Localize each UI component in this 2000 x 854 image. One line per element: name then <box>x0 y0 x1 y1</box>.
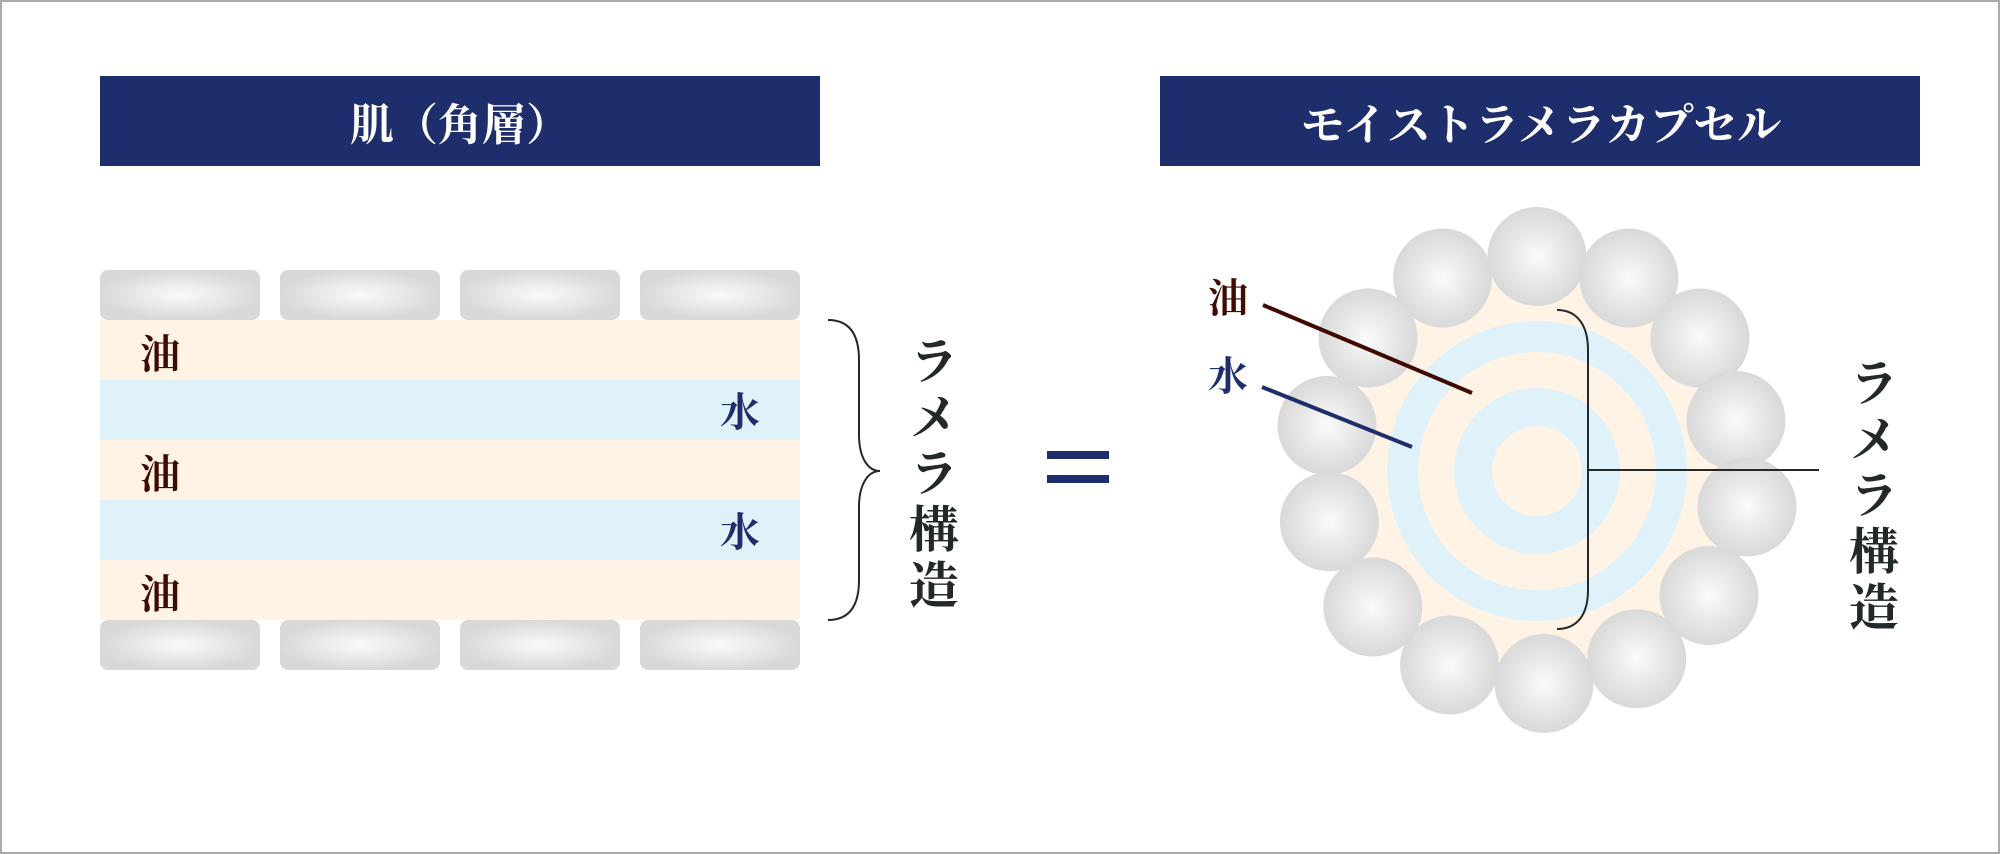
oil layer 3: 油 <box>140 572 180 617</box>
water layer 2: 水 <box>720 510 760 555</box>
brace: skin lamellar range <box>828 320 880 620</box>
top row of corneocyte bricks <box>100 270 800 320</box>
heading: skin (stratum corneum) <box>100 76 820 166</box>
water layer 1: 水 <box>720 390 760 435</box>
oil layer 2: 油 <box>140 452 180 497</box>
panel: skin lamellar diagram <box>100 270 800 670</box>
panel: capsule diagram <box>1278 207 1796 733</box>
capsule outer spheres <box>1278 207 1796 733</box>
capsule concentric oil and water rings <box>1345 279 1729 663</box>
callout: oil <box>1208 276 1472 393</box>
label: lamellar structure (right): ラメラ構造 <box>1842 357 1899 637</box>
callout: water <box>1208 354 1412 447</box>
brace: capsule lamellar range with leader line <box>1557 310 1819 629</box>
oil layer 1 <box>100 320 800 380</box>
callout: oil: 油 <box>1208 276 1248 321</box>
heading: skin (stratum corneum): 肌（角層） <box>350 101 570 150</box>
label: lamellar structure (left): ラメラ構造 <box>902 335 959 615</box>
heading: moist lamellar capsule: モイストラメラカプセル <box>1301 101 1781 150</box>
callout: water: 水 <box>1208 354 1248 399</box>
water layer 2 <box>100 500 800 560</box>
heading: moist lamellar capsule <box>1160 76 1920 166</box>
oil layer 1: 油 <box>140 332 180 377</box>
water layer 1 <box>100 380 800 440</box>
oil layer 3 <box>100 560 800 620</box>
icon: equals sign <box>1047 451 1109 483</box>
oil layer 2 <box>100 440 800 500</box>
bottom row of corneocyte bricks <box>100 620 800 670</box>
